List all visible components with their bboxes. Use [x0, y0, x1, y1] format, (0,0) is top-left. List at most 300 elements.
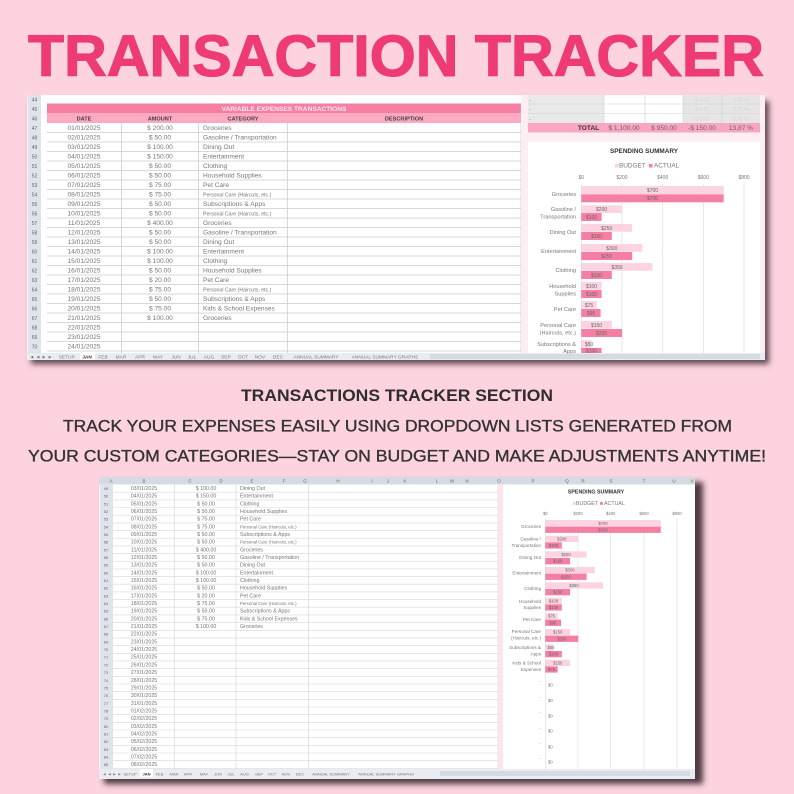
category labels: Kids & School — [512, 660, 541, 666]
bar values: $150 — [553, 660, 563, 666]
amount column: $ 150.00 — [196, 494, 216, 500]
amount column: $ 400.00 — [147, 220, 173, 227]
amount column: $ 50.00 — [149, 296, 171, 303]
amount column: $ 100.00 — [196, 486, 216, 492]
date column: 09/01/2025 — [67, 201, 101, 208]
column letters: R — [581, 478, 585, 484]
text block: description line 2: YOUR CUSTOM CATEGORIES—STAY ON BUDGET AND MAKE ADJUSTMENTS ANYTIME! — [28, 448, 766, 466]
category column: Entertainment — [203, 154, 244, 160]
category column: Subscriptions & Apps — [203, 201, 266, 208]
category column: Pet Care — [240, 517, 261, 523]
date column: 14/01/2025 — [67, 248, 101, 256]
actual bars — [545, 527, 661, 673]
category column: Household Supplies — [240, 509, 287, 515]
bar values: $100 — [586, 284, 597, 290]
column letters: M — [450, 478, 454, 484]
amount column: $ 100.00 — [196, 570, 216, 576]
category labels: Household — [549, 284, 576, 290]
bar values: $250 — [601, 226, 612, 232]
panel: budget totals: 0,00 % — [733, 107, 749, 113]
row numbers: 65 — [32, 297, 37, 303]
empty category rows: - — [539, 695, 541, 700]
category column: Groceries — [240, 547, 263, 553]
budget bars — [545, 520, 661, 666]
chart legend: ACTUAL — [604, 501, 625, 507]
category labels — [509, 524, 542, 672]
amount column: $ 50.00 — [197, 555, 215, 561]
category column: Dining Out — [240, 563, 266, 569]
bar values — [585, 188, 658, 354]
row numbers: 64 — [32, 288, 37, 294]
sheet tabs: JUL — [188, 354, 197, 360]
date column: 13/01/2025 — [131, 563, 157, 569]
row numbers: 57 — [32, 221, 37, 227]
bar values: $150 — [591, 234, 602, 240]
amount column: $ 75.00 — [197, 601, 215, 607]
amount column: $ 50.00 — [149, 230, 171, 236]
date column: 12/01/2025 — [67, 230, 101, 236]
bar values: $150 — [591, 323, 602, 329]
row numbers: 62 — [32, 268, 37, 274]
category column: Household Supplies — [240, 586, 287, 592]
column letters: T — [643, 478, 646, 484]
row numbers: 56 — [104, 540, 109, 545]
panel: variable expenses table: AMOUNT — [148, 116, 173, 122]
bar values: $100 — [586, 348, 597, 354]
row numbers: 71 — [104, 655, 109, 660]
date column: 24/01/2025 — [67, 344, 101, 350]
column letters: B — [142, 478, 146, 484]
category labels: Clothing — [555, 268, 576, 274]
row numbers: 75 — [104, 685, 109, 690]
panel: budget totals: 0,00 % — [733, 98, 749, 104]
date column: 20/01/2025 — [67, 306, 101, 312]
bar values: $300 — [565, 568, 575, 573]
category column — [240, 486, 299, 630]
row numbers: 47 — [32, 126, 37, 132]
sheet tabs: SETUP — [123, 772, 137, 776]
category labels: Pet Care — [554, 307, 576, 313]
row numbers: 66 — [32, 306, 37, 312]
sheet tabs: OCT — [268, 772, 277, 776]
empty category rows: - — [539, 741, 541, 746]
bar values: $100 — [549, 543, 559, 548]
column letters: F — [283, 478, 286, 484]
row numbers: 49 — [104, 486, 109, 491]
amount column: $ 50.00 — [197, 501, 215, 507]
bar chart: spending summary (bottom): $600 — [639, 511, 649, 516]
row numbers: 72 — [104, 662, 109, 667]
category column: Kids & School Expenses — [203, 306, 276, 312]
row numbers: 50 — [32, 154, 37, 160]
empty category rows: - — [539, 756, 541, 761]
amount column: $ 75.00 — [197, 517, 215, 523]
date column: 09/01/2025 — [131, 532, 157, 538]
amount column: $ 50.00 — [197, 563, 215, 569]
row numbers: 57 — [104, 547, 109, 552]
category labels: Entertainment — [512, 571, 542, 576]
row numbers — [32, 98, 37, 350]
date column: 08/01/2025 — [67, 192, 101, 198]
row numbers: 68 — [104, 632, 109, 637]
bar values: $700 — [598, 528, 608, 532]
panel: budget totals: - — [529, 107, 531, 113]
date column: 04/02/2025 — [131, 732, 157, 738]
date column: 07/01/2025 — [67, 182, 101, 189]
column letters: K — [403, 478, 407, 484]
amount column: $ 50.00 — [197, 540, 215, 546]
chart legend: BUDGET — [619, 162, 646, 170]
column letters: H — [336, 478, 340, 484]
category column: Clothing — [240, 578, 259, 584]
date column: 06/01/2025 — [67, 172, 101, 180]
sheet tabs: DEC — [273, 354, 284, 360]
date column: 26/01/2025 — [131, 662, 157, 668]
date column: 25/01/2025 — [131, 655, 157, 661]
amount column: $ 20.00 — [149, 277, 171, 284]
amount column: $ 50.00 — [149, 239, 171, 246]
row numbers: 82 — [104, 739, 109, 744]
category column: Subscriptions & Apps — [240, 532, 290, 538]
sheet tabs: ANNUAL SUMMARY — [312, 772, 350, 776]
bar values: $100 — [549, 598, 559, 604]
column letters: E — [250, 478, 254, 484]
sheet tabs: JUL — [227, 772, 235, 776]
date column: 01/01/2025 — [67, 125, 101, 132]
date column: 11/01/2025 — [131, 547, 157, 553]
row numbers: 62 — [104, 586, 109, 591]
empty category rows: $0 — [548, 698, 553, 703]
bar chart: spending summary (top) — [528, 142, 760, 355]
panel: budget totals: $ 0.00 — [695, 98, 709, 104]
bar values: $100 — [586, 215, 597, 221]
category labels: (Haircuts, etc.) — [511, 636, 541, 640]
bar values: $95 — [550, 620, 557, 625]
amount column: $ 100.00 — [147, 258, 173, 265]
panel: budget totals: $ 1,100.00 — [608, 125, 640, 132]
category column: Entertainment — [203, 248, 244, 256]
bar values: $200 — [557, 536, 567, 542]
bar values: $250 — [561, 552, 571, 557]
category column: Household Supplies — [203, 172, 262, 180]
chart legend — [615, 162, 680, 170]
category labels: Apps — [563, 349, 576, 355]
bar chart: spending summary (bottom): $400 — [606, 511, 616, 516]
text block: description line 1: TRACK YOUR EXPENSES EASILY USING DROPDOWN LISTS GENERATED FROM — [63, 418, 732, 436]
heading: section title: TRANSACTIONS TRACKER SECTION — [241, 387, 553, 405]
panel: transactions table (bottom) — [104, 484, 498, 769]
bar values: $350 — [569, 583, 579, 588]
category column: Gasoline / Transportation — [240, 555, 299, 561]
row numbers: 80 — [104, 724, 109, 729]
amount column: $ 20.00 — [197, 593, 215, 599]
row numbers: 85 — [104, 762, 109, 767]
amount column: $ 50.00 — [149, 163, 171, 170]
actual bars — [581, 194, 724, 353]
empty category rows: - — [539, 726, 541, 731]
row numbers: 78 — [104, 708, 109, 713]
row numbers: 59 — [32, 240, 37, 246]
date column — [67, 125, 101, 350]
column letters: A — [109, 478, 113, 484]
category column: Personal Care (Haircuts, etc.) — [240, 524, 297, 529]
sheet tabs: MAR — [170, 772, 179, 776]
row numbers: 55 — [104, 532, 109, 537]
bar values: $150 — [553, 559, 563, 564]
row numbers: 65 — [104, 609, 109, 614]
sheet tabs: SETUP — [59, 354, 75, 360]
row numbers: 70 — [104, 647, 109, 652]
sheet tabs: NOV — [255, 354, 266, 360]
bar values: $700 — [598, 521, 608, 526]
category labels: (Haircuts, etc.) — [540, 330, 576, 336]
panel: variable expenses table: DATE — [77, 116, 92, 122]
date column: 04/01/2025 — [131, 494, 157, 500]
category labels: Supplies — [523, 605, 542, 610]
amount column: $ 100.00 — [196, 624, 216, 630]
row numbers: 67 — [104, 624, 109, 629]
category labels: Clothing — [524, 586, 541, 591]
row numbers: 79 — [104, 716, 109, 721]
panel: budget totals: $ 0.00 — [695, 116, 709, 122]
empty category rows: $0 — [548, 728, 553, 734]
date column: 31/01/2025 — [131, 701, 157, 707]
row numbers: 45 — [32, 107, 37, 113]
category labels: Supplies — [555, 292, 576, 298]
category column: Entertainment — [240, 494, 274, 500]
amount column: $ 50.00 — [149, 201, 171, 208]
date column: 16/01/2025 — [67, 268, 101, 274]
sheet tabs: SEP — [255, 772, 263, 776]
column letters: G — [303, 478, 307, 484]
amount column: $ 75.00 — [197, 524, 215, 530]
sheet tabs: ANNUAL SUMMARY GRAPHS — [358, 772, 414, 776]
row numbers: 59 — [104, 563, 109, 568]
date column: 22/01/2025 — [131, 632, 157, 638]
category labels: Expenses — [521, 667, 542, 672]
category column: Gasoline / Transportation — [203, 134, 277, 142]
amount column: $ 50.00 — [149, 172, 171, 180]
row numbers — [104, 486, 109, 767]
row numbers: 48 — [32, 136, 37, 142]
category column: Dining Out — [240, 486, 266, 492]
panel: budget totals: - — [529, 116, 531, 122]
sheet tabs: JUN — [171, 354, 181, 360]
column letters: U — [672, 478, 676, 484]
sheet tabs: JAN — [82, 354, 92, 360]
category column: Pet Care — [203, 182, 229, 189]
row numbers: 51 — [32, 164, 37, 170]
category labels: Subscriptions & — [537, 342, 576, 348]
date column: 14/01/2025 — [131, 570, 157, 576]
date column: 17/01/2025 — [67, 277, 101, 284]
category labels: Dining Out — [519, 555, 542, 560]
row numbers: 54 — [32, 192, 37, 198]
amount column: $ 100.00 — [147, 144, 173, 151]
bar values: $700 — [647, 188, 658, 194]
date column: 15/01/2025 — [131, 578, 157, 584]
sheet tabs: APR — [184, 772, 192, 776]
category column: Subscriptions & Apps — [203, 296, 266, 303]
bar values: $100 — [586, 292, 597, 298]
row numbers: 67 — [32, 316, 37, 322]
row numbers: 60 — [104, 570, 109, 575]
column letters: V — [690, 478, 694, 484]
amount column: $ 400.00 — [196, 547, 216, 553]
category column: Clothing — [240, 501, 259, 507]
category column: Clothing — [203, 258, 228, 265]
category labels: Apps — [531, 652, 542, 656]
date column: 23/01/2025 — [67, 334, 101, 341]
amount column: $ 150.00 — [147, 154, 173, 160]
category column: Gasoline / Transportation — [203, 230, 277, 236]
category column: Personal Care (Haircuts, etc.) — [203, 212, 272, 218]
column letters: D — [219, 478, 223, 484]
row numbers: 70 — [32, 344, 37, 350]
bar values: $700 — [647, 196, 658, 202]
row numbers: 69 — [32, 335, 37, 341]
bar values: $150 — [553, 590, 563, 595]
date column: 02/02/2025 — [131, 716, 157, 722]
sheet tabs: ANNUAL SUMMARY GRAPHS — [352, 354, 418, 360]
sheet tabs: ANNUAL SUMMARY — [293, 354, 339, 360]
sheet tabs: JAN — [142, 772, 151, 776]
panel: budget totals: TOTAL — [578, 125, 599, 132]
row numbers: 69 — [104, 639, 109, 644]
bar values: $150 — [553, 630, 563, 635]
bar chart: spending summary (bottom) — [509, 490, 682, 769]
category column — [203, 125, 277, 322]
bar values: $300 — [606, 246, 618, 252]
amount column: $ 50.00 — [149, 210, 171, 218]
panel: variable expenses table: CATEGORY — [227, 116, 259, 122]
empty category rows: $0 — [548, 682, 553, 688]
date column: 20/01/2025 — [131, 616, 157, 622]
date column: 03/01/2025 — [67, 144, 101, 151]
category column: Pet Care — [240, 593, 261, 599]
panel: budget totals: -$ 150.00 — [688, 125, 716, 132]
column letters: J — [387, 478, 389, 484]
date column — [131, 486, 157, 768]
date column: 18/01/2025 — [67, 286, 101, 294]
category column: Personal Care (Haircuts, etc.) — [240, 601, 297, 606]
sheet tabs: MAR — [116, 354, 127, 360]
date column: 27/01/2025 — [131, 670, 157, 676]
date column: 07/02/2025 — [131, 754, 157, 760]
date column: 01/02/2025 — [131, 708, 157, 714]
row numbers: 46 — [32, 116, 37, 122]
row numbers: 63 — [104, 593, 109, 598]
panel: budget totals — [528, 95, 760, 132]
category column: Groceries — [203, 220, 232, 227]
row numbers: 68 — [32, 326, 37, 332]
row numbers: 53 — [32, 183, 37, 189]
row numbers: 50 — [104, 494, 109, 499]
amount column: $ 200.00 — [147, 125, 173, 132]
row numbers: 53 — [104, 517, 109, 522]
bar values: $150 — [591, 273, 602, 279]
column letters: P — [531, 478, 535, 484]
bar chart: spending summary (bottom): SPENDING SUMMARY — [568, 490, 625, 496]
date column: 06/01/2025 — [131, 509, 157, 515]
empty category rows — [539, 679, 553, 764]
bar values: $75 — [585, 303, 593, 309]
category column: Personal Care (Haircuts, etc.) — [203, 288, 272, 294]
category column: Household Supplies — [203, 268, 262, 274]
category column: Groceries — [203, 125, 232, 132]
date column: 30/01/2025 — [131, 693, 157, 699]
row numbers: 84 — [104, 754, 109, 760]
row numbers: 61 — [104, 578, 109, 583]
amount column: $ 50.00 — [197, 532, 215, 538]
row numbers: 83 — [104, 747, 109, 752]
category labels: Household — [519, 599, 541, 604]
amount column: $ 50.00 — [149, 268, 171, 274]
column letters: Q — [565, 478, 569, 484]
category labels: Personal Care — [540, 323, 576, 329]
row numbers: 81 — [104, 732, 109, 736]
bar values: $250 — [601, 254, 612, 260]
date column: 08/01/2025 — [131, 524, 157, 530]
amount column: $ 75.00 — [149, 182, 171, 189]
category column: Pet Care — [203, 277, 229, 284]
row numbers: 73 — [104, 670, 109, 675]
category column: Subscriptions & Apps — [240, 609, 290, 615]
sheet tabs: JUN — [214, 772, 222, 776]
date column: 23/01/2025 — [131, 639, 157, 645]
row numbers: 77 — [104, 701, 109, 706]
amount column: $ 75.00 — [197, 616, 215, 622]
chart legend — [573, 501, 625, 507]
category labels: Groceries — [521, 524, 542, 529]
bar chart: spending summary (bottom): $200 — [573, 511, 583, 516]
date column: 17/01/2025 — [131, 593, 157, 599]
empty category rows: - — [539, 710, 541, 715]
amount column: $ 50.00 — [197, 509, 215, 515]
category column: Dining Out — [203, 239, 234, 246]
column letters — [109, 478, 694, 484]
row numbers: 54 — [104, 524, 109, 529]
category labels: Transportation — [512, 543, 541, 548]
bar values: $95 — [587, 311, 595, 317]
category labels: Pet Care — [523, 617, 541, 622]
sheet tabs — [102, 769, 690, 777]
category labels: Gasoline / — [520, 536, 542, 542]
panel: top spreadsheet — [27, 95, 769, 364]
sheet tabs: ◄ ◄ ► ► — [102, 772, 122, 776]
panel: variable expenses table: VARIABLE EXPENSES TRANSACTIONS — [222, 106, 347, 113]
sheet tabs: AUG — [204, 354, 214, 360]
row numbers: 58 — [32, 230, 37, 236]
chart legend: ACTUAL — [654, 162, 680, 170]
title: TRANSACTION TRACKER — [28, 24, 764, 89]
panel: variable expenses table — [32, 98, 521, 353]
panel: budget totals: 13,87 % — [729, 125, 753, 132]
row numbers: 61 — [32, 259, 37, 265]
date column: 05/02/2025 — [131, 739, 157, 745]
amount column: $ 100.00 — [196, 578, 216, 584]
category labels — [537, 192, 576, 355]
bar values: $50 — [548, 645, 555, 650]
panel: budget totals: - — [529, 98, 531, 104]
date column: 19/01/2025 — [67, 296, 101, 303]
row numbers: 51 — [104, 501, 109, 506]
sheet tabs: MAY — [200, 772, 209, 776]
date column: 03/02/2025 — [131, 724, 157, 730]
budget bars — [581, 186, 724, 348]
amount column: $ 75.00 — [149, 306, 171, 312]
date column: 03/01/2025 — [131, 486, 157, 492]
